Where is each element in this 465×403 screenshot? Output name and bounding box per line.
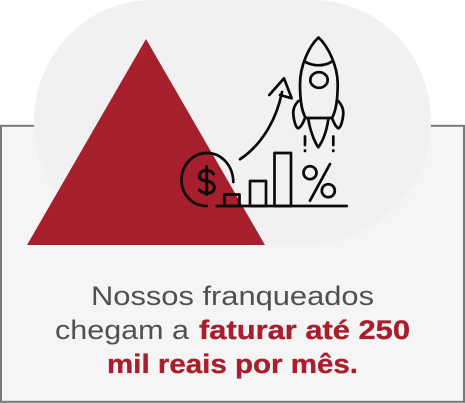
text line 1: Nossos franqueados bbox=[91, 281, 374, 311]
text line 2 bbox=[55, 315, 410, 345]
icon: rocket bbox=[293, 38, 343, 151]
icon: rocket growth chart bbox=[182, 38, 347, 206]
red triangle bbox=[27, 39, 265, 245]
icon: dollar coin bbox=[182, 153, 233, 206]
text block: caption bbox=[55, 281, 410, 379]
icon: growth arrow bbox=[240, 78, 292, 159]
panel: bordered card bbox=[1, 126, 464, 402]
text line 3: mil reais por mês. bbox=[107, 349, 358, 379]
text line 2: faturar até 250 bbox=[199, 315, 410, 345]
text line 2: chegam a bbox=[55, 315, 190, 345]
background blob bbox=[34, 0, 431, 245]
bar chart bbox=[217, 153, 347, 206]
icon: percent sign bbox=[304, 164, 335, 201]
